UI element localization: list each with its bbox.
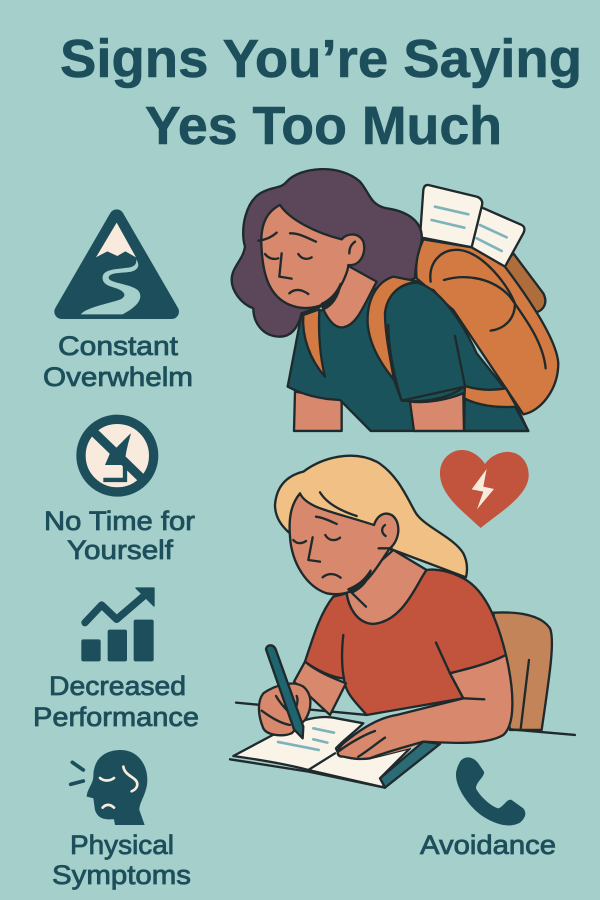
illustration: tired woman writing <box>230 456 575 788</box>
title: Signs You’re Saying <box>60 29 582 89</box>
straps <box>303 309 325 377</box>
label: no time for yourself: No Time for <box>44 506 195 536</box>
pen <box>266 645 303 738</box>
near arm <box>338 655 512 759</box>
icon: no time crossed circle <box>81 419 154 492</box>
label: constant overwhelm <box>43 331 193 392</box>
near forearm <box>410 393 464 431</box>
label: decreased performance: Performance <box>33 702 199 732</box>
hair <box>275 456 467 577</box>
writing hand <box>259 684 310 735</box>
backpack rear pocket <box>487 253 545 312</box>
face <box>290 493 398 594</box>
label: physical symptoms: Physical <box>70 830 174 860</box>
icon: broken heart <box>440 450 529 528</box>
neck and face <box>323 265 377 327</box>
illustration: tired woman with backpack <box>232 169 558 431</box>
title: Yes Too Much <box>145 96 502 156</box>
label: physical symptoms <box>52 830 191 890</box>
label: decreased performance: Decreased <box>49 671 186 701</box>
near sleeve and torso <box>385 283 528 431</box>
neck <box>347 550 427 624</box>
label: constant overwhelm: Overwhelm <box>43 362 193 392</box>
book <box>380 742 440 788</box>
icon: phone <box>456 757 525 825</box>
icon: head with pain lines <box>71 750 147 825</box>
skin arm far <box>294 392 342 431</box>
shirt <box>305 570 506 715</box>
icon: bar chart with arrow <box>81 588 154 661</box>
label: no time for yourself: Yourself <box>67 535 174 565</box>
far arm <box>294 662 346 715</box>
label: decreased performance <box>33 671 199 732</box>
backpack body <box>416 239 558 414</box>
table line <box>236 703 575 735</box>
papers <box>420 185 524 267</box>
hand on book <box>338 715 423 759</box>
label: avoidance: Avoidance <box>420 830 556 860</box>
lower strap <box>464 386 517 407</box>
title <box>60 29 582 156</box>
label: physical symptoms: Symptoms <box>52 860 191 890</box>
icon: mountain overwhelm <box>62 217 172 314</box>
chair <box>493 612 552 730</box>
shirt <box>288 282 528 431</box>
hair <box>232 169 422 337</box>
label: constant overwhelm: Constant <box>58 331 179 361</box>
label: no time for yourself <box>44 506 195 565</box>
